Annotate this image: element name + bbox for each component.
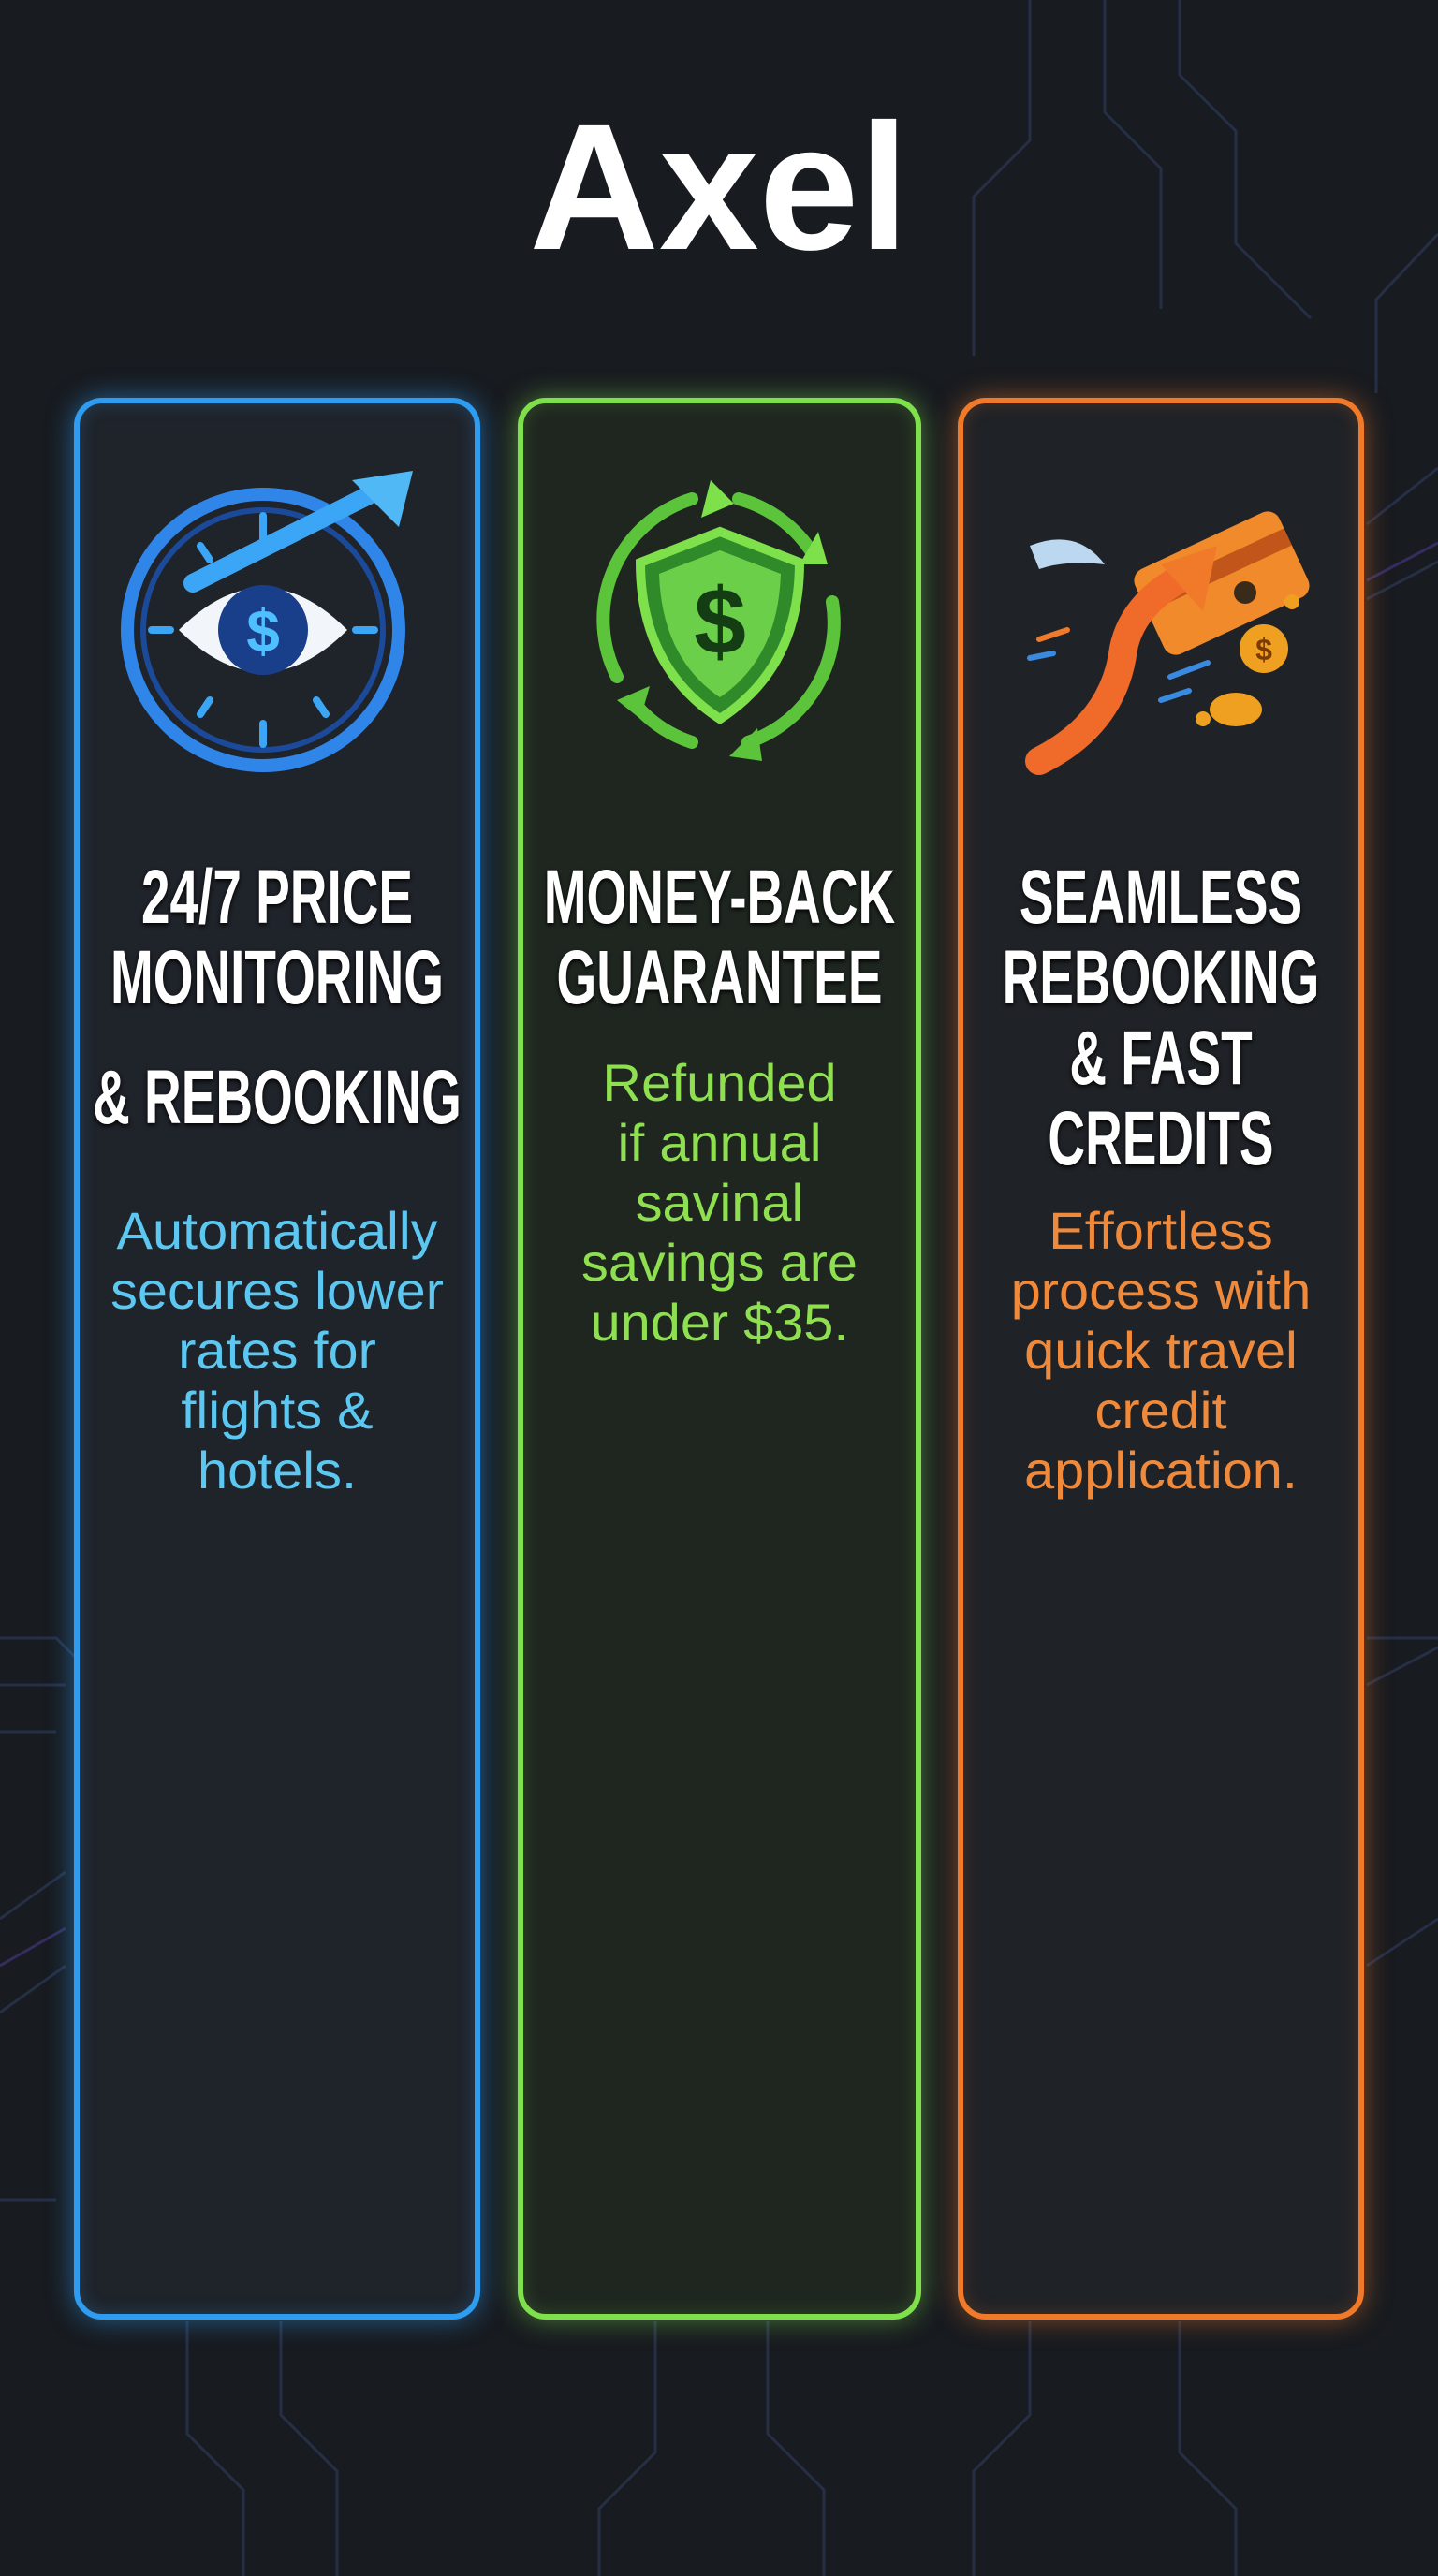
icon: card with arrow and coins [1025,511,1310,775]
description: hotels. [198,1441,357,1500]
description [1011,1201,1311,1500]
heading: REBOOKING [1003,935,1319,1020]
heading: & REBOOKING [93,1055,462,1140]
panel: seamless rebooking [958,398,1364,2320]
heading: 24/7 PRICE [141,855,413,940]
title: Axel [529,86,909,287]
description: credit [1094,1381,1227,1440]
description: Effortless [1049,1201,1273,1260]
icon: shield with cycle arrows [596,480,841,761]
description: Automatically [116,1201,438,1260]
heading: MONITORING [110,935,444,1020]
description: process with [1011,1261,1311,1320]
icon: eye clock with arrow: $ [246,597,280,665]
description: under $35. [591,1293,848,1352]
heading: SEAMLESS [1020,855,1302,940]
panel: price monitoring [74,398,480,2320]
description: secures lower [110,1261,444,1320]
description: if annual [617,1113,822,1172]
heading [93,855,462,1140]
description: quick travel [1024,1321,1298,1380]
heading [544,855,895,1020]
heading: GUARANTEE [557,935,882,1020]
description [110,1201,444,1500]
heading [1003,855,1319,1181]
icon: card with arrow and coins: $ [1255,633,1272,666]
heading: MONEY-BACK [544,855,895,940]
heading: CREDITS [1048,1096,1274,1181]
description: rates for [178,1321,376,1380]
icon: shield with cycle arrows: $ [694,569,745,674]
description [581,1053,858,1352]
description: savinal [636,1173,803,1232]
description: flights & [181,1381,374,1440]
description: application. [1024,1441,1298,1500]
description: Refunded [602,1053,837,1112]
description: savings are [581,1233,858,1292]
heading: & FAST [1069,1016,1253,1101]
panel: money-back guarantee [518,398,921,2320]
icon: eye clock with arrow [121,471,413,772]
